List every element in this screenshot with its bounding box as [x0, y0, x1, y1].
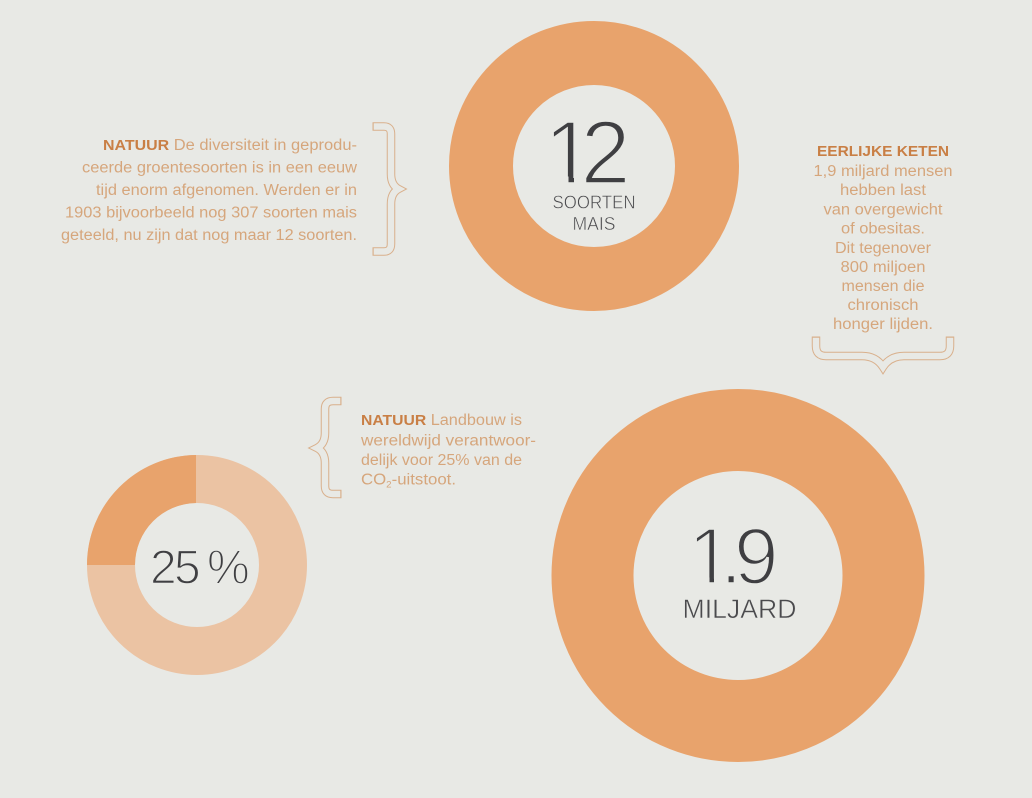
text block: eerlijke keten	[814, 143, 952, 333]
label: soorten mais	[552, 192, 636, 234]
segment: 25 percent	[87, 455, 196, 565]
text block: natuur landbouw: -uitstoot.	[392, 472, 456, 488]
text block: natuur diversiteit: 1903 bijvoorbeeld nog 307 soorten mais	[65, 204, 357, 222]
text block: natuur landbouw	[360, 412, 536, 490]
number: 12: 12	[544, 104, 631, 204]
text block: natuur diversiteit	[61, 137, 358, 244]
number: 1.9: 1.9	[688, 512, 778, 600]
donut chart: 12 soorten mais	[481, 53, 707, 279]
text block: eerlijke keten: 1,9 miljard mensen	[814, 163, 952, 180]
label: soorten mais: MAIS	[572, 213, 616, 234]
text block: natuur diversiteit: ceerde groentesoorten is in een eeuw	[82, 160, 358, 176]
text block: eerlijke keten: van overgewicht	[824, 202, 943, 218]
text block: natuur landbouw: wereldwijd verantwoor-	[360, 432, 536, 450]
icon: right curly brace	[372, 126, 398, 252]
icon: bottom curly brace	[816, 336, 950, 367]
number: 25 %: 25 %	[150, 542, 250, 594]
text block: natuur diversiteit: geteeld, nu zijn dat nog maar 12 soorten.	[61, 227, 357, 244]
text block: natuur diversiteit: NATUUR De diversiteit in geprodu-	[103, 137, 357, 154]
text block: eerlijke keten: 800 miljoen	[840, 259, 926, 276]
text block: natuur landbouw: 2	[386, 480, 392, 490]
text block: natuur landbouw: delijk voor 25% van de	[361, 452, 522, 469]
text block: eerlijke keten: chronisch	[848, 297, 918, 314]
text block: natuur landbouw: CO	[361, 472, 384, 488]
donut chart: 1.9 miljard	[592, 430, 884, 721]
donut chart: 25 percent	[87, 455, 283, 651]
text block: natuur landbouw: NATUUR Landbouw is	[361, 412, 522, 429]
text block: eerlijke keten: EERLIJKE KETEN	[817, 143, 949, 160]
text block: eerlijke keten: Dit tegenover	[835, 240, 931, 257]
text block: eerlijke keten: honger lijden.	[833, 316, 933, 333]
text block: eerlijke keten: mensen die	[842, 278, 924, 295]
label: soorten mais: SOORTEN	[552, 192, 636, 212]
icon: left curly brace	[317, 401, 342, 494]
text block: eerlijke keten: of obesitas.	[841, 220, 925, 238]
text block: eerlijke keten: hebben last	[840, 182, 927, 199]
text block: natuur diversiteit: tijd enorm afgenomen. Werden er in	[96, 182, 357, 199]
label: miljard: MILJARD	[682, 594, 796, 624]
